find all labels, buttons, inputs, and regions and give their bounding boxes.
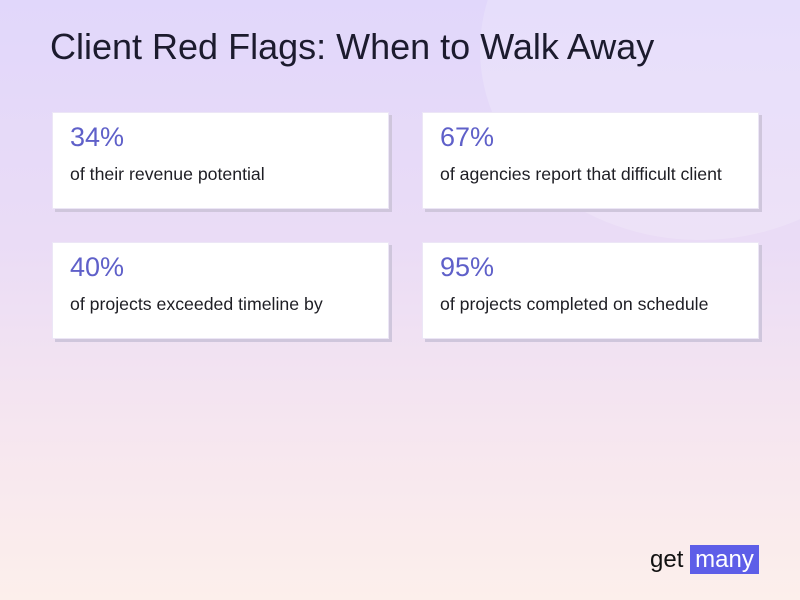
card: 34%: 34% (70, 122, 124, 152)
card: 34%: of their revenue potential (70, 164, 265, 184)
card: 67%: of agencies report that difficult client (440, 164, 722, 184)
card: 67%: 67% (440, 122, 494, 152)
card: 34% (52, 112, 389, 209)
card: 40%: 40% (70, 252, 124, 282)
text: many (695, 546, 754, 573)
card: 40%: of projects exceeded timeline by (70, 294, 323, 314)
card: 67% (422, 112, 759, 209)
card: 95%: 95% (440, 252, 494, 282)
title: Client Red Flags: When to Walk Away (50, 26, 654, 67)
card: 40% (52, 242, 389, 339)
logo: get (650, 546, 683, 573)
logo (650, 545, 759, 574)
card: 95% (422, 242, 759, 339)
card: 95%: of projects completed on schedule (440, 294, 708, 314)
